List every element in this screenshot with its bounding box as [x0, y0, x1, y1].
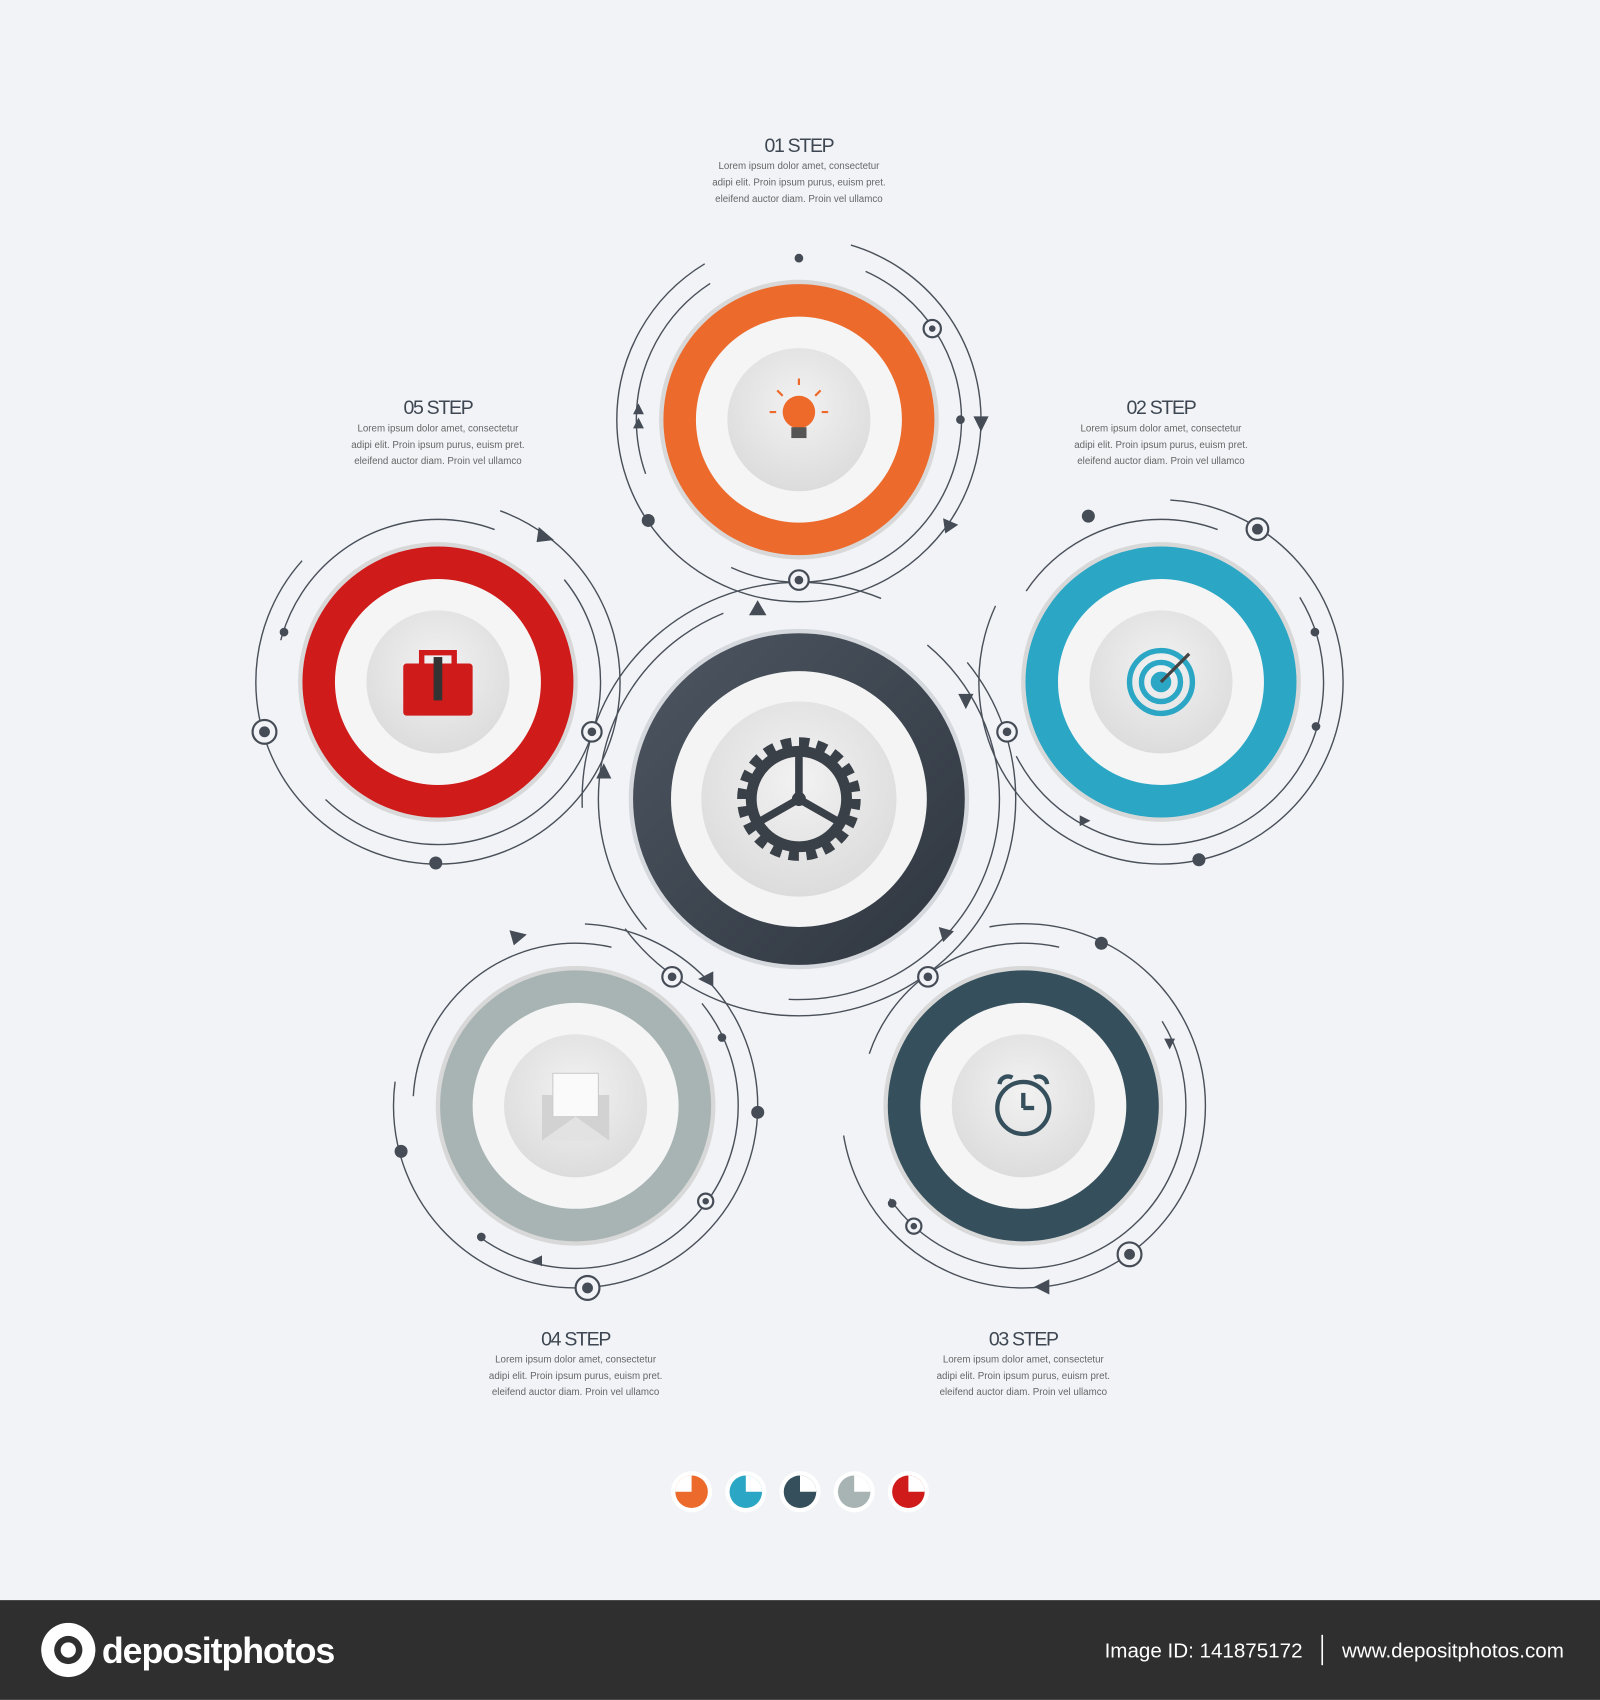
circle: step 3 dark teal: [883, 966, 1163, 1246]
circle: step 1 orange: [659, 280, 939, 559]
circle: step 4 gray: [436, 966, 715, 1246]
footer bar: www.depositphotos.com: [1341, 1640, 1564, 1663]
text: step 1: eleifend auctor diam. Proin vel ullamco: [715, 194, 883, 205]
text: step 3: eleifend auctor diam. Proin vel ullamco: [940, 1387, 1108, 1398]
circle: step 2 blue: [1021, 542, 1301, 822]
text: step 5: 05 STEP: [403, 397, 473, 419]
arrows: [509, 403, 1175, 1294]
footer bar: Image ID: 141875172: [1105, 1640, 1303, 1663]
text: step 5: [351, 397, 525, 467]
text: step 2: Lorem ipsum dolor amet, consectetur: [1080, 424, 1242, 435]
icon: envelope: [542, 1073, 609, 1141]
text: step 4: 04 STEP: [541, 1328, 610, 1350]
text: step 3: 03 STEP: [989, 1328, 1058, 1350]
text: step 4: adipi elit. Proin ipsum purus, euism pret.: [489, 1371, 662, 1382]
text: step 1: adipi elit. Proin ipsum purus, euism pret.: [712, 178, 886, 189]
text: step 4: Lorem ipsum dolor amet, consectetur: [495, 1355, 657, 1366]
text: step 2: 02 STEP: [1127, 397, 1196, 419]
footer bar: depositphotos: [102, 1631, 334, 1671]
connector dots: [280, 254, 1320, 1241]
text: step 1: [712, 135, 886, 205]
text: step 5: eleifend auctor diam. Proin vel ullamco: [354, 456, 522, 467]
icon: camera logo: [41, 1623, 95, 1677]
text: step 1: Lorem ipsum dolor amet, consectetur: [718, 161, 880, 172]
connector arcs: [256, 238, 1343, 1288]
icon: clock: [997, 1076, 1049, 1134]
text: step 5: adipi elit. Proin ipsum purus, euism pret.: [351, 440, 525, 451]
text: step 2: adipi elit. Proin ipsum purus, euism pret.: [1074, 440, 1248, 451]
text: step 5: Lorem ipsum dolor amet, consectetur: [357, 424, 519, 435]
text: step 3: adipi elit. Proin ipsum purus, euism pret.: [937, 1371, 1110, 1382]
text: step 3: [937, 1328, 1110, 1398]
pie icons legend: [671, 1471, 929, 1512]
icon: toolbox: [403, 653, 473, 716]
icon: target: [1130, 651, 1192, 713]
text: step 1: 01 STEP: [764, 135, 834, 157]
circle: step 5 red: [298, 542, 578, 822]
icon: gear: [745, 745, 853, 853]
circle: center gear: [629, 629, 969, 969]
footer bar: [0, 1600, 1600, 1700]
text: step 4: [489, 1328, 662, 1398]
text: step 3: Lorem ipsum dolor amet, consectetur: [943, 1355, 1105, 1366]
icon: bulb: [770, 378, 828, 438]
text: step 2: eleifend auctor diam. Proin vel ullamco: [1077, 456, 1245, 467]
text: step 2: [1074, 397, 1248, 467]
text: step 4: eleifend auctor diam. Proin vel ullamco: [492, 1387, 660, 1398]
